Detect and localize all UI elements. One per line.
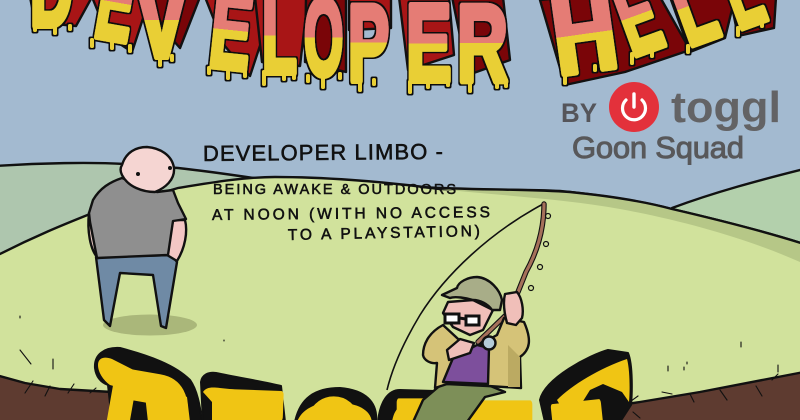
ground: right dirt xyxy=(535,372,800,420)
fishing line xyxy=(387,203,545,390)
logo: by toggl goon squad xyxy=(561,82,781,165)
handwritten caption xyxy=(203,139,490,244)
face xyxy=(443,300,493,335)
bottom letters xyxy=(106,369,603,420)
lower hand xyxy=(447,339,474,360)
title: Developer Hell xyxy=(30,0,778,105)
glasses xyxy=(445,314,479,325)
title letters with drips xyxy=(30,0,778,105)
front hill xyxy=(0,177,800,420)
left arm xyxy=(88,212,100,258)
man standing xyxy=(88,147,197,336)
eyes xyxy=(136,166,172,176)
jacket shading xyxy=(508,345,520,387)
back hill left xyxy=(0,163,280,260)
caption body: AT NOON (WITH NO ACCESS xyxy=(212,204,490,224)
ground: left dirt xyxy=(0,375,112,420)
trousers xyxy=(413,383,505,420)
trousers xyxy=(96,255,177,328)
shadow xyxy=(103,314,197,336)
reel xyxy=(482,336,496,350)
caption body: BEING AWAKE & OUTDOORS xyxy=(213,182,456,198)
head xyxy=(120,147,174,192)
toggl wordmark: toggl xyxy=(671,83,781,132)
bottom title lettering xyxy=(94,346,633,420)
caption body: TO A PLAYSTATION) xyxy=(288,223,480,244)
grass tufts xyxy=(20,316,778,418)
upper hand xyxy=(504,292,523,325)
fishing rod xyxy=(478,204,550,342)
hat xyxy=(442,277,502,310)
icon: power button xyxy=(609,82,659,132)
by label: BY xyxy=(561,98,597,128)
bottom letter top faces xyxy=(98,358,630,420)
caption heading: DEVELOPER LIMBO - xyxy=(203,139,443,166)
fisherman xyxy=(387,203,550,420)
title extrusion blocks xyxy=(30,0,776,85)
shirt xyxy=(443,345,489,384)
right arm xyxy=(167,220,186,261)
back hill right xyxy=(640,169,800,270)
jacket xyxy=(423,318,529,388)
caption body xyxy=(212,182,490,244)
goon squad: Goon Squad xyxy=(572,130,744,165)
bottom letter outlines xyxy=(95,348,632,420)
shirt xyxy=(89,178,186,258)
hill shadow band xyxy=(420,187,800,262)
